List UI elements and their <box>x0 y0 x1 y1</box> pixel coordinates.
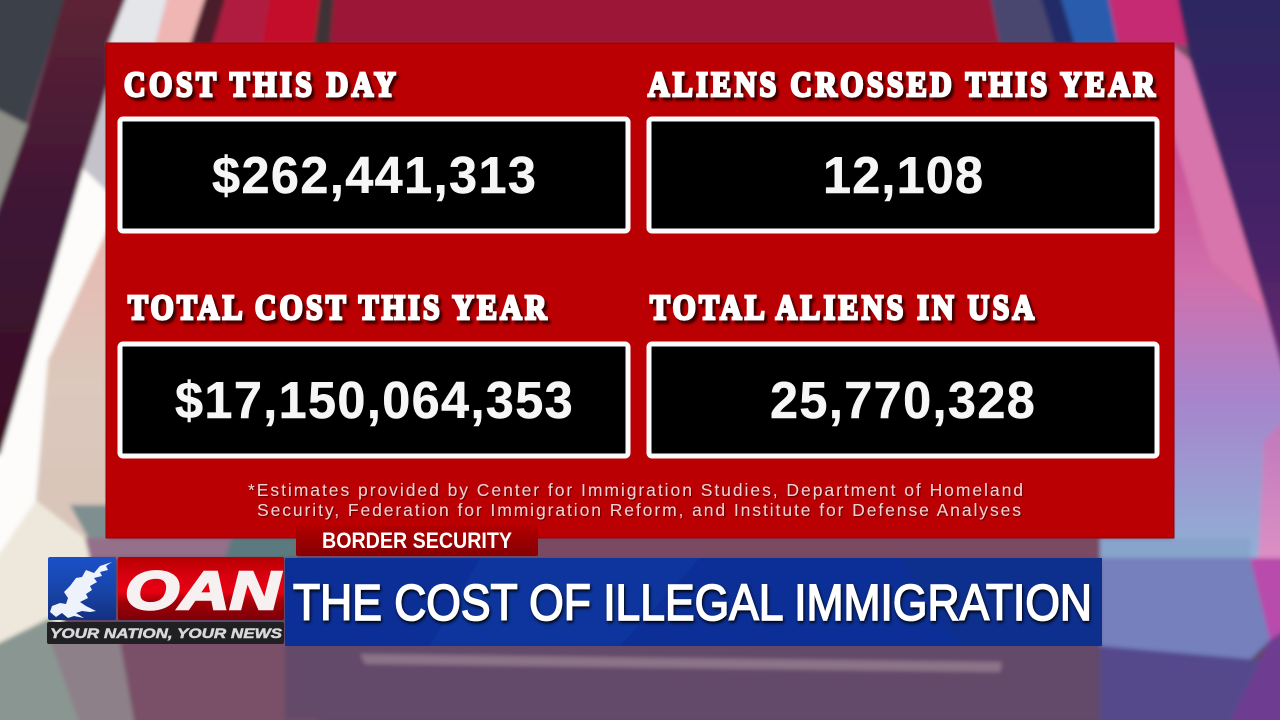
icon: eagle on blue tile <box>48 557 116 620</box>
headline banner: THE COST OF ILLEGAL IMMIGRATION <box>293 574 1092 631</box>
footnote: sources: *Estimates provided by Center for Immigration Studies, Department of Homeland <box>248 480 1023 500</box>
headline banner <box>285 558 1102 646</box>
right side <box>1177 0 1280 440</box>
value box: total aliens in usa: 25,770,328 <box>770 371 1035 429</box>
heading: total aliens in usa: TOTAL ALIENS IN USA <box>650 288 1035 327</box>
heading: cost this day: COST THIS DAY <box>124 65 396 104</box>
panel: immigration cost statistics <box>106 43 1174 538</box>
heading: aliens crossed this year: ALIENS CROSSED THIS YEAR <box>648 65 1155 104</box>
value box: cost this day <box>120 119 628 231</box>
heading: total cost this year: TOTAL COST THIS YEAR <box>128 288 547 327</box>
value box: total cost this year: $17,150,064,353 <box>175 371 573 429</box>
value box: total cost this year <box>120 344 628 456</box>
logo: OAN <box>47 557 284 644</box>
tagline strip <box>47 622 284 644</box>
tagline strip: YOUR NATION, YOUR NEWS <box>50 625 283 641</box>
footnote: sources: Security, Federation for Immigration Reform, and Institute for Defense Analyses <box>257 500 1021 520</box>
OAN wordmark on red tile: OAN <box>125 561 281 621</box>
OAN wordmark on red tile <box>118 557 284 621</box>
value box: aliens crossed this year: 12,108 <box>823 146 983 204</box>
centre lower floor <box>298 538 1100 558</box>
value box: total aliens in usa <box>649 344 1157 456</box>
category tag: border security: BORDER SECURITY <box>322 528 512 553</box>
value box: cost this day: $262,441,313 <box>212 146 536 204</box>
footnote: sources <box>248 480 1023 520</box>
value box: aliens crossed this year <box>649 119 1157 231</box>
left white sweep <box>36 225 108 538</box>
